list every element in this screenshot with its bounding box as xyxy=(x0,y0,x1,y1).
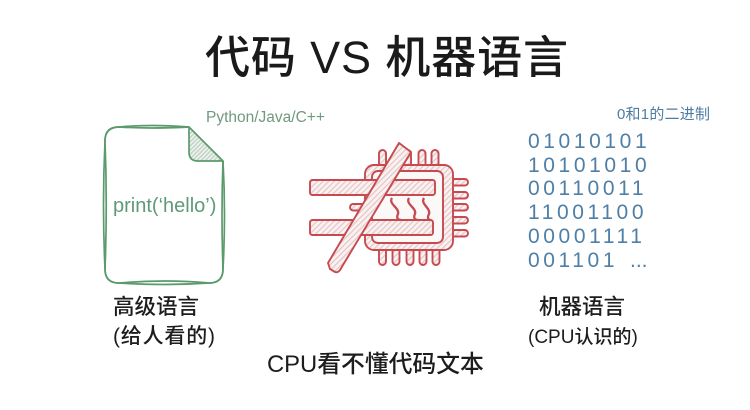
binary digits: 00110011 xyxy=(528,177,647,200)
panel: high-level language document xyxy=(104,126,224,284)
binary digits: 01010101 xyxy=(528,130,650,153)
horizontal bars xyxy=(310,180,435,195)
label: binary: 0和1的二进制 xyxy=(617,106,710,123)
heat waves xyxy=(391,198,431,220)
conclusion: CPU看不懂代码文本 xyxy=(267,351,484,378)
chip pins xyxy=(350,150,468,265)
binary digits: 10101010 xyxy=(528,154,650,177)
code text: print(‘hello’) xyxy=(113,195,216,217)
chip body xyxy=(365,165,453,250)
caption: for humans: (给人看的) xyxy=(113,325,215,348)
binary digits: ... xyxy=(630,249,648,272)
binary digits: 001101 xyxy=(528,249,618,272)
caption: for the CPU: (CPU认识的) xyxy=(528,326,638,348)
title: 代码 VS 机器语言 xyxy=(205,32,568,83)
label: languages: Python/Java/C++ xyxy=(206,109,325,126)
heading: high-level language: 高级语言 xyxy=(113,295,199,319)
diagonal slash xyxy=(328,143,411,272)
binary digits: 11001100 xyxy=(528,201,647,224)
icon: document outline xyxy=(104,126,224,284)
icon: crossed-out CPU chip xyxy=(310,143,468,272)
heading: machine language: 机器语言 xyxy=(539,295,625,319)
binary digits xyxy=(528,130,650,272)
binary digits: 00001111 xyxy=(528,225,646,248)
